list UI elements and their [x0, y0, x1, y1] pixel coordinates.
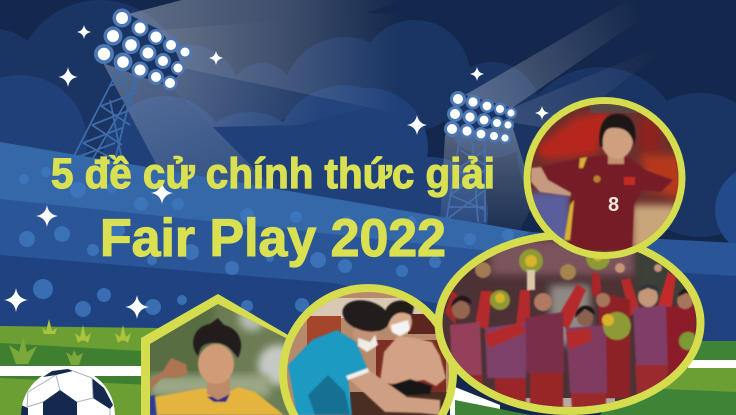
crowd dots: [19, 167, 514, 317]
tower: right floodlight: [444, 91, 517, 222]
floodlight lamps left: [94, 8, 192, 90]
players jerseys: [450, 322, 482, 375]
photo: medical staff treating player, circle frame: [279, 284, 457, 415]
tower: left floodlight: [72, 8, 192, 160]
hands: [615, 263, 625, 273]
players shorts: [470, 374, 484, 385]
seated player: [380, 336, 446, 386]
floodlight lamps right: [444, 91, 517, 144]
player behind: [598, 291, 630, 398]
title: [51, 150, 495, 268]
photo: young player in yellow, hexagon frame: [141, 294, 305, 415]
title line 1: 5 đề cử chính thức giải: [51, 150, 495, 198]
grass tufts: [9, 319, 131, 365]
clouds: [0, 0, 736, 273]
player arm: [150, 358, 188, 390]
green pitch: [0, 326, 736, 415]
sparkles: [4, 25, 549, 319]
icon: soccer ball: [21, 368, 115, 415]
photo: captain in red jersey, circle frame: [524, 97, 686, 259]
title line 2: Fair Play 2022: [100, 209, 446, 268]
jersey number: 8: [608, 194, 619, 216]
red sleeves: [484, 322, 526, 348]
bouquets: [519, 249, 543, 273]
photo: team with bouquets, ellipse frame: [434, 231, 705, 415]
faces: [452, 301, 470, 319]
raised arms: [475, 291, 492, 330]
stadium stands bands: [0, 142, 736, 345]
player jersey: [150, 387, 284, 415]
staff member in blue shirt: [288, 330, 368, 415]
stadium light beams: [103, 0, 680, 230]
